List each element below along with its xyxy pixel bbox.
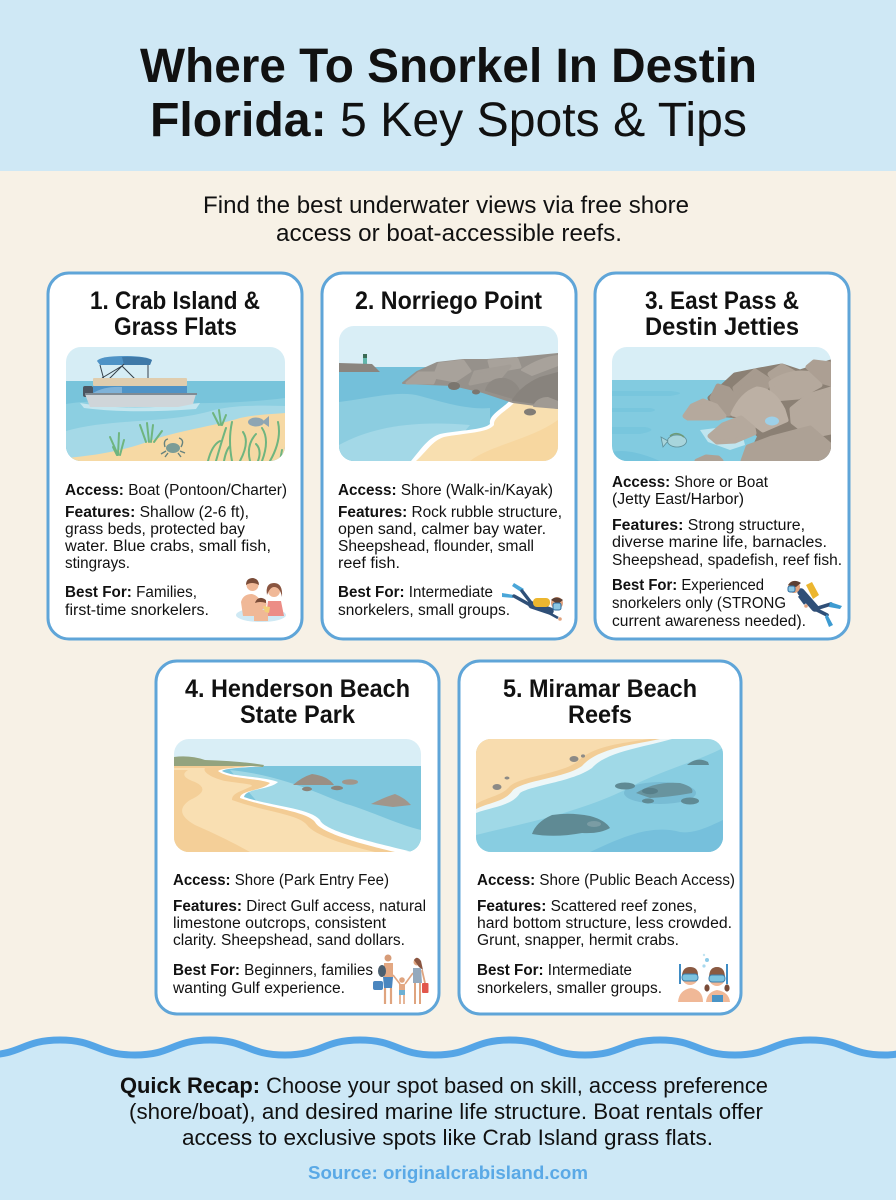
text: card 1 details: Access: Boat (Pontoon/Charter) bbox=[65, 482, 287, 499]
title: Florida: 5 Key Spots & Tips bbox=[150, 94, 747, 147]
text: card 1 details: water. Blue crabs, small fish, bbox=[64, 538, 271, 555]
heading: card 4: 4. Henderson Beach bbox=[185, 675, 410, 703]
sand bbox=[174, 766, 395, 852]
recap text: (shore/boat), and desired marine life structure. Boat rentals offer bbox=[129, 1099, 763, 1124]
grass bbox=[110, 410, 282, 461]
text: card 1 details: Best For: Families, bbox=[65, 584, 197, 601]
text: card 2 details: reef fish. bbox=[338, 555, 400, 572]
text: card 4 details: limestone outcrops, consistent bbox=[173, 915, 387, 932]
text: card 3 details: snorkelers only (STRONG bbox=[612, 595, 786, 612]
heading: card 3: 3. East Pass & bbox=[645, 287, 799, 315]
heading: card 1 bbox=[90, 287, 260, 341]
heading: card 5: Reefs bbox=[568, 701, 632, 729]
text: card 5 details bbox=[477, 872, 735, 997]
recap text: Quick Recap: Choose your spot based on skill, access preference bbox=[120, 1073, 768, 1098]
heading: card 2: 2. Norriego Point bbox=[355, 287, 543, 315]
text: card 5 details: Access: Shore (Public Beach Access) bbox=[477, 872, 735, 889]
fish in rocks bbox=[765, 416, 779, 426]
text: card 2 details: Best For: Intermediate bbox=[338, 584, 493, 601]
text: card 4 details bbox=[172, 872, 426, 997]
boulders bbox=[685, 362, 831, 461]
text: card 1 details: Features: Shallow (2-6 ft), bbox=[65, 504, 249, 521]
heading: card 1: Grass Flats bbox=[114, 313, 237, 341]
text: card 2 details: Features: Rock rubble structure, bbox=[338, 504, 562, 521]
fish bbox=[248, 416, 269, 427]
text: card 3 details: Best For: Experienced bbox=[612, 577, 764, 594]
illustration: pontoon boat over grass flats bbox=[66, 347, 285, 461]
text: card 1 details: stingrays. bbox=[65, 555, 130, 572]
jetty and marker bbox=[339, 354, 380, 372]
icon: diving snorkeler bbox=[788, 581, 842, 627]
heading: card 3: Destin Jetties bbox=[645, 313, 799, 341]
title bbox=[140, 40, 757, 147]
panel: Crab Island and Grass Flats bbox=[48, 273, 302, 639]
text: card 1 details: first-time snorkelers. bbox=[65, 602, 209, 619]
text: card 3 details: Features: Strong structure, bbox=[612, 517, 805, 534]
foam and sand bbox=[411, 395, 558, 461]
heading: card 5 bbox=[503, 675, 697, 729]
footer band with wave bbox=[0, 1040, 896, 1200]
fish bbox=[661, 434, 686, 447]
text: card 5 details: hard bottom structure, less crowded. bbox=[477, 915, 732, 932]
illustration: jetty boulders bbox=[612, 347, 831, 461]
illustration: rocky point and beach bbox=[339, 326, 558, 461]
rocks bbox=[403, 354, 558, 416]
text: card 3 details: (Jetty East/Harbor) bbox=[612, 491, 744, 508]
text: card 4 details: Access: Shore (Park Entry Fee) bbox=[173, 872, 389, 889]
title: Where To Snorkel In Destin bbox=[140, 40, 757, 93]
text: card 3 details: current awareness needed). bbox=[612, 613, 806, 630]
panel: East Pass and Destin Jetties bbox=[595, 273, 849, 639]
heading: card 3 bbox=[645, 287, 799, 341]
text: card 2 details: Access: Shore (Walk-in/Kayak) bbox=[338, 482, 553, 499]
icon: swimming snorkeler bbox=[502, 583, 563, 621]
text: card 3 details: Access: Shore or Boat bbox=[612, 474, 769, 491]
text: card 5 details: snorkelers, smaller groups. bbox=[477, 980, 662, 997]
text: card 5 details: Grunt, snapper, hermit crabs. bbox=[477, 932, 679, 949]
header band bbox=[0, 0, 896, 171]
text: card 4 details: clarity. Sheepshead, sand dollars. bbox=[173, 932, 405, 949]
subtitle: access or boat-accessible reefs. bbox=[276, 220, 622, 247]
text: card 4 details: Best For: Beginners, families bbox=[173, 962, 373, 979]
heading: card 4 bbox=[185, 675, 410, 729]
text: card 3 details bbox=[612, 474, 842, 630]
text: card 2 details: open sand, calmer bay water. bbox=[338, 521, 546, 538]
text: card 3 details: diverse marine life, barnacles. bbox=[612, 534, 827, 551]
text: card 2 details: Sheepshead, flounder, small bbox=[338, 538, 534, 555]
pontoon boat bbox=[83, 356, 197, 407]
text: card 2 details bbox=[338, 482, 562, 619]
recap text: access to exclusive spots like Crab Island grass flats. bbox=[182, 1125, 713, 1150]
text: card 1 details: grass beds, protected bay bbox=[65, 521, 245, 538]
text: card 5 details: Features: Scattered reef zones, bbox=[477, 898, 697, 915]
text: card 2 details: snorkelers, small groups. bbox=[338, 602, 510, 619]
text: card 4 details: Features: Direct Gulf access, natural bbox=[173, 898, 426, 915]
panel: Miramar Beach Reefs bbox=[459, 661, 741, 1014]
heading: card 1: 1. Crab Island & bbox=[90, 287, 260, 315]
foam and sand bbox=[476, 739, 672, 813]
heading: card 5: 5. Miramar Beach bbox=[503, 675, 697, 703]
crab bbox=[161, 438, 185, 457]
text: card 3 details: Sheepshead, spadefish, reef fish. bbox=[612, 552, 842, 569]
subtitle bbox=[203, 192, 689, 247]
icon: two snorkelers bbox=[678, 954, 730, 1002]
icon: family on beach bbox=[373, 954, 428, 1004]
source: Source: originalcrabisland.com bbox=[308, 1163, 588, 1183]
text: card 4 details: wanting Gulf experience. bbox=[172, 980, 345, 997]
text: card 1 details bbox=[64, 482, 287, 619]
rocks bbox=[293, 774, 411, 807]
panel: Henderson Beach State Park bbox=[156, 661, 439, 1014]
illustration: beach with limestone outcrops bbox=[174, 739, 421, 852]
panel: Norriego Point bbox=[322, 273, 576, 639]
reefs bbox=[532, 760, 709, 836]
foam bbox=[218, 766, 410, 852]
subtitle: Find the best underwater views via free shore bbox=[203, 192, 689, 219]
heading: card 4: State Park bbox=[240, 701, 355, 729]
icon: family in water bbox=[236, 578, 286, 622]
recap text bbox=[120, 1073, 768, 1150]
illustration: scattered reefs bbox=[476, 739, 723, 852]
text: card 5 details: Best For: Intermediate bbox=[477, 962, 632, 979]
